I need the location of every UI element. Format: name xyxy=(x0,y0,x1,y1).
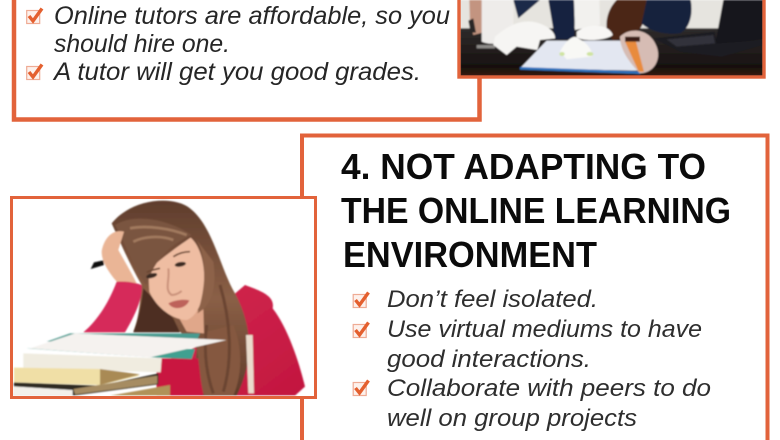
bullet: virtual mediums: Use virtual mediums to have xyxy=(387,316,702,343)
icon: checkbox tick xyxy=(353,380,368,396)
bullet: affordable tutors: Online tutors are affordable, so you xyxy=(54,2,450,30)
photo: tired student with books xyxy=(10,196,317,399)
icon: checkbox tick xyxy=(27,64,42,80)
icon: checkbox tick xyxy=(27,8,42,24)
icon: checkbox tick xyxy=(353,322,368,338)
icon: checkbox tick xyxy=(353,292,368,308)
photo frame xyxy=(12,198,316,398)
bullet continuation: good interactions. xyxy=(387,346,591,373)
heading: section 4 title xyxy=(341,146,731,275)
section 3 bullet list xyxy=(27,2,450,86)
photo background xyxy=(10,196,317,399)
bullet: good grades: A tutor will get you good grades. xyxy=(52,58,421,86)
photo frame xyxy=(459,0,764,77)
bullet continuation: well on group projects xyxy=(387,405,637,432)
heading: section 4 title: ENVIRONMENT xyxy=(343,234,597,275)
bullet: collaborate: Collaborate with peers to do xyxy=(387,375,711,402)
bullet continuation: should hire one. xyxy=(54,30,230,58)
photo: stressed woman at a desk xyxy=(459,0,764,77)
panel: section 4 frame xyxy=(302,136,768,440)
bullet: isolation: Don’t feel isolated. xyxy=(387,286,598,313)
panel: section 3 frame xyxy=(14,0,480,120)
heading: section 4 title: THE ONLINE LEARNING xyxy=(341,190,731,231)
section 4 bullet list xyxy=(353,286,711,432)
heading: section 4 title: 4. NOT ADAPTING TO xyxy=(341,146,706,187)
